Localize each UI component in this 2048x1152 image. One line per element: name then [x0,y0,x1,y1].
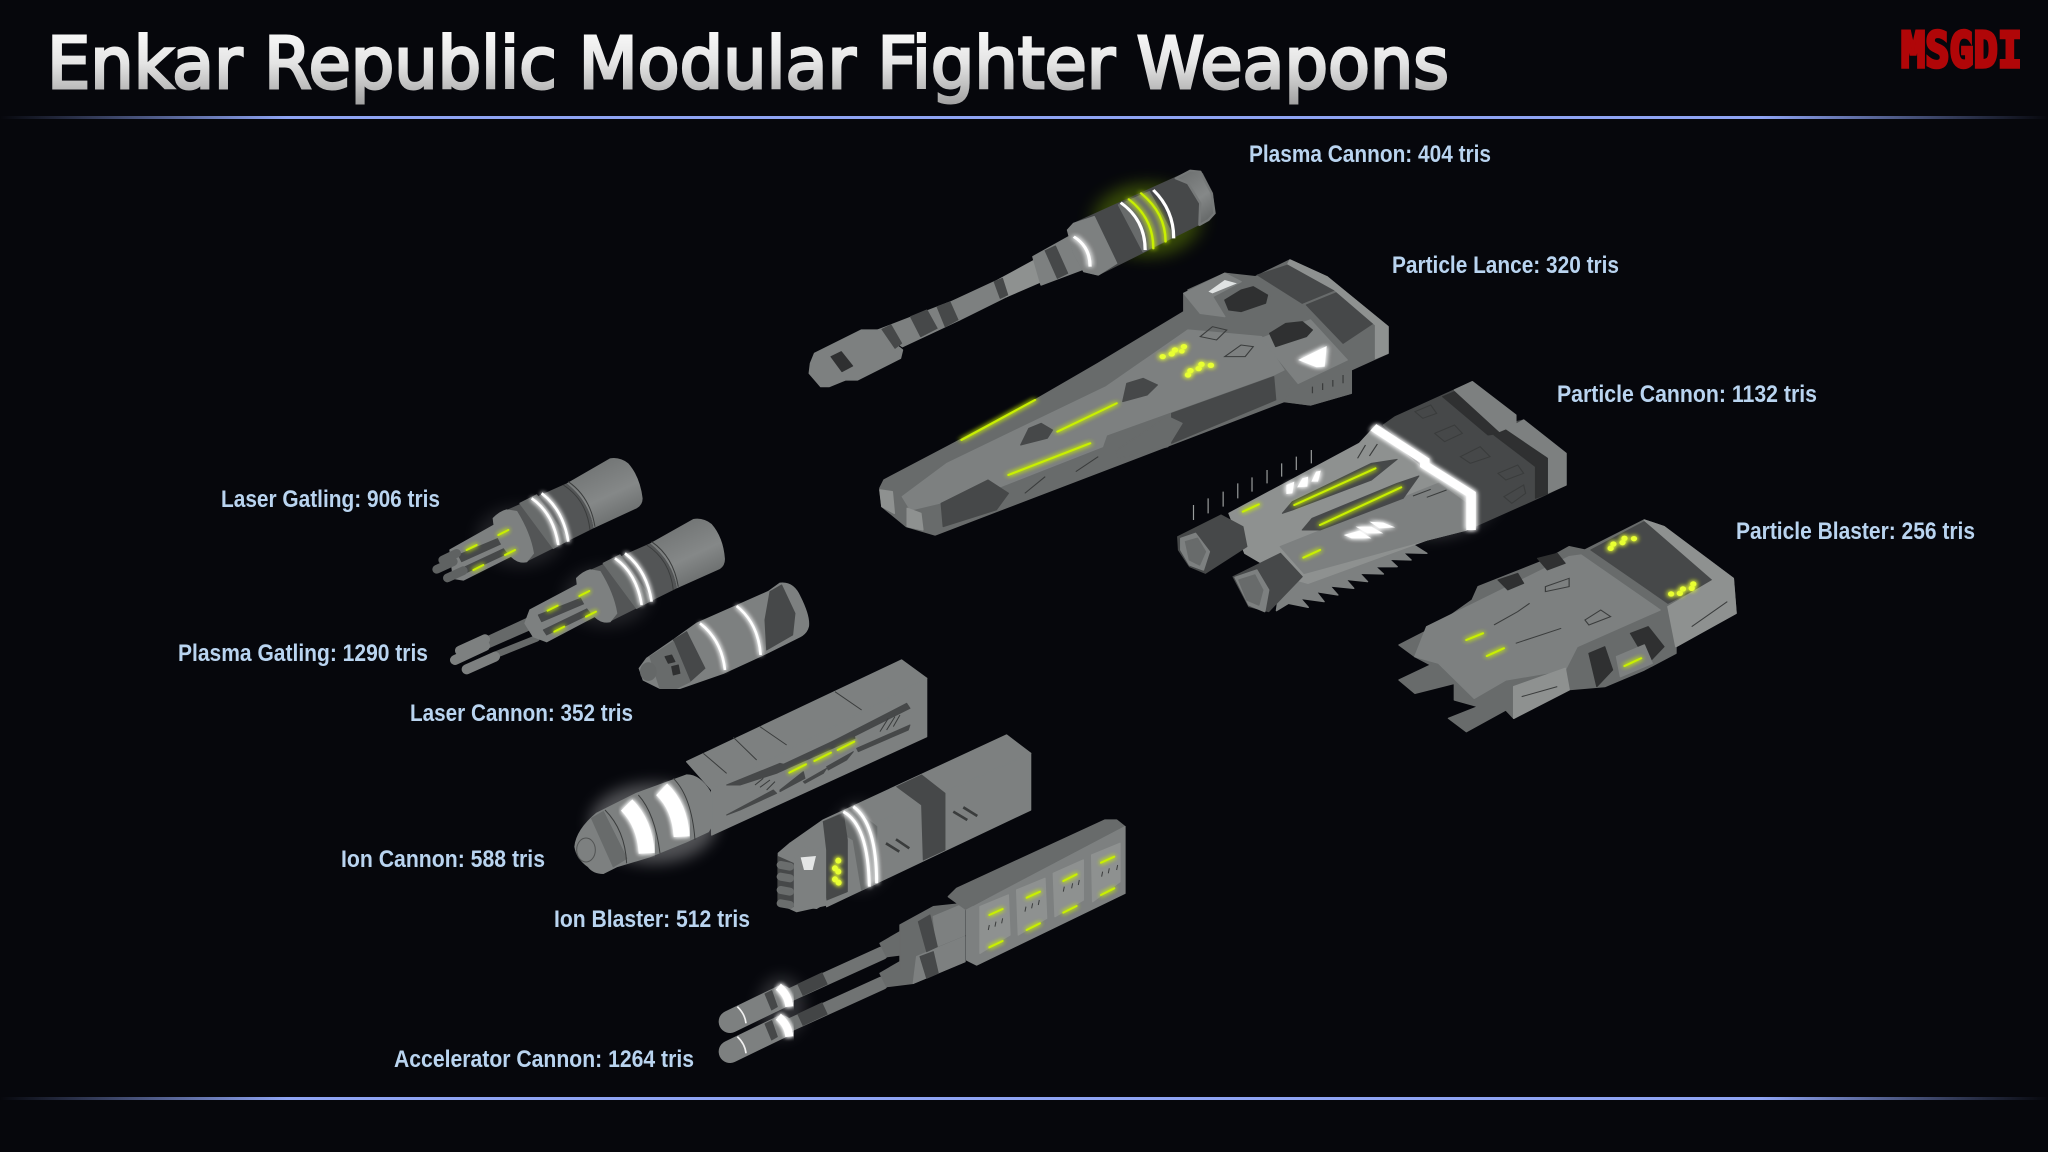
label: ion blaster: Ion Blaster: 512 tris [554,906,750,933]
label: plasma gatling: Plasma Gatling: 1290 tris [178,640,428,667]
weapon: particle lance [880,260,1388,535]
label: particle lance: Particle Lance: 320 tris [1392,252,1619,279]
weapon: plasma cannon [809,171,1215,387]
weapon: plasma gatling [455,519,725,669]
title: Enkar Republic Modular Fighter Weapons [47,22,1449,105]
weapon: ion blaster [778,735,1031,912]
label: laser gatling: Laser Gatling: 906 tris [221,486,440,513]
weapon: laser gatling [437,458,643,580]
label: laser cannon: Laser Cannon: 352 tris [410,700,633,727]
weapon: ion cannon [575,660,927,873]
weapon: laser cannon [639,583,809,688]
label: ion cannon: Ion Cannon: 588 tris [341,846,545,873]
label: particle blaster: Particle Blaster: 256 tris [1736,518,1975,545]
weapon: particle blaster [1399,520,1736,732]
logo: MSGDI: MSGDI [1901,22,2022,79]
label: plasma cannon: Plasma Cannon: 404 tris [1249,141,1491,168]
weapon: accelerator cannon [730,820,1125,1053]
label: particle cannon: Particle Cannon: 1132 tris [1557,381,1817,408]
label: accelerator cannon: Accelerator Cannon: 1264 tris [394,1046,694,1073]
weapon: particle cannon [1178,382,1566,612]
